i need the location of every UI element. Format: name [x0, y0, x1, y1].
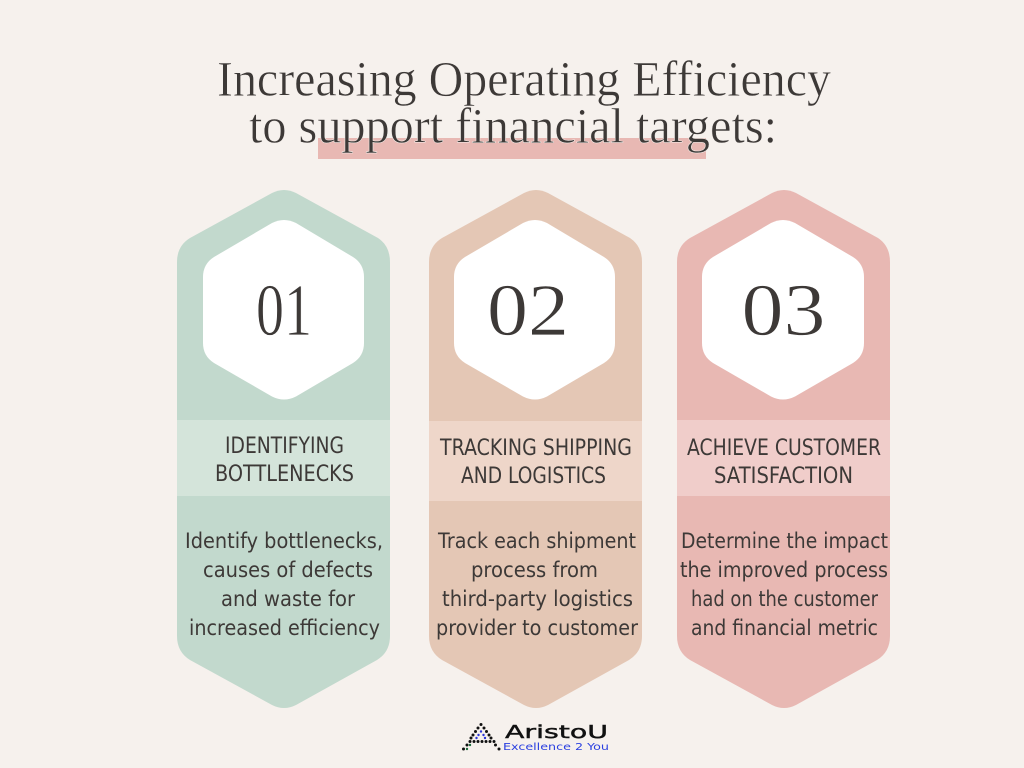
panel: step 01: [177, 190, 390, 708]
description: and waste for: [221, 587, 355, 611]
title highlight: [318, 138, 706, 159]
heading: ACHIEVE CUSTOMER: [687, 436, 881, 461]
number 02: 02: [487, 270, 569, 352]
description: Track each shipment: [437, 529, 636, 553]
heading: [215, 434, 354, 487]
description: [680, 529, 888, 640]
number 01: 01: [256, 270, 312, 352]
heading: IDENTIFYING: [225, 434, 344, 459]
title: Increasing Operating Efficiency: [217, 50, 831, 106]
description: process from: [471, 558, 598, 582]
icon: dotted triangle: [462, 723, 500, 750]
white hexagon: [702, 220, 864, 400]
panel background: green: [177, 190, 390, 708]
heading band: [429, 421, 642, 501]
description: and financial metric: [691, 616, 878, 640]
number 03: 03: [742, 270, 826, 352]
description: Identify bottlenecks,: [185, 529, 383, 553]
heading: [687, 436, 881, 489]
description: increased efficiency: [189, 616, 380, 640]
white hexagon: [203, 220, 364, 400]
heading band: [177, 420, 390, 496]
description: the improved process: [680, 558, 888, 582]
panel: step 02: [429, 190, 642, 708]
white hexagon: [454, 220, 615, 400]
heading: SATISFACTION: [714, 464, 853, 489]
description: [185, 529, 383, 640]
logo name: AristoU: [505, 722, 608, 743]
heading band: [677, 420, 890, 496]
heading: TRACKING SHIPPING: [439, 436, 632, 461]
logo tagline: Excellence 2 You: [503, 742, 609, 753]
panel background: pink: [677, 190, 890, 708]
heading: BOTTLENECKS: [215, 462, 354, 487]
description: third-party logistics: [442, 587, 633, 611]
logo: AristoU: [462, 722, 609, 753]
description: provider to customer: [436, 616, 638, 640]
panel: step 03: [677, 190, 890, 708]
description: causes of defects: [203, 558, 373, 582]
title: [217, 50, 831, 154]
heading: [439, 436, 632, 489]
description: [436, 529, 638, 640]
heading: AND LOGISTICS: [461, 464, 606, 489]
title: to support financial targets:: [249, 98, 777, 154]
description: had on the customer: [691, 587, 878, 611]
panel background: tan: [429, 190, 642, 708]
description: Determine the impact: [681, 529, 888, 553]
